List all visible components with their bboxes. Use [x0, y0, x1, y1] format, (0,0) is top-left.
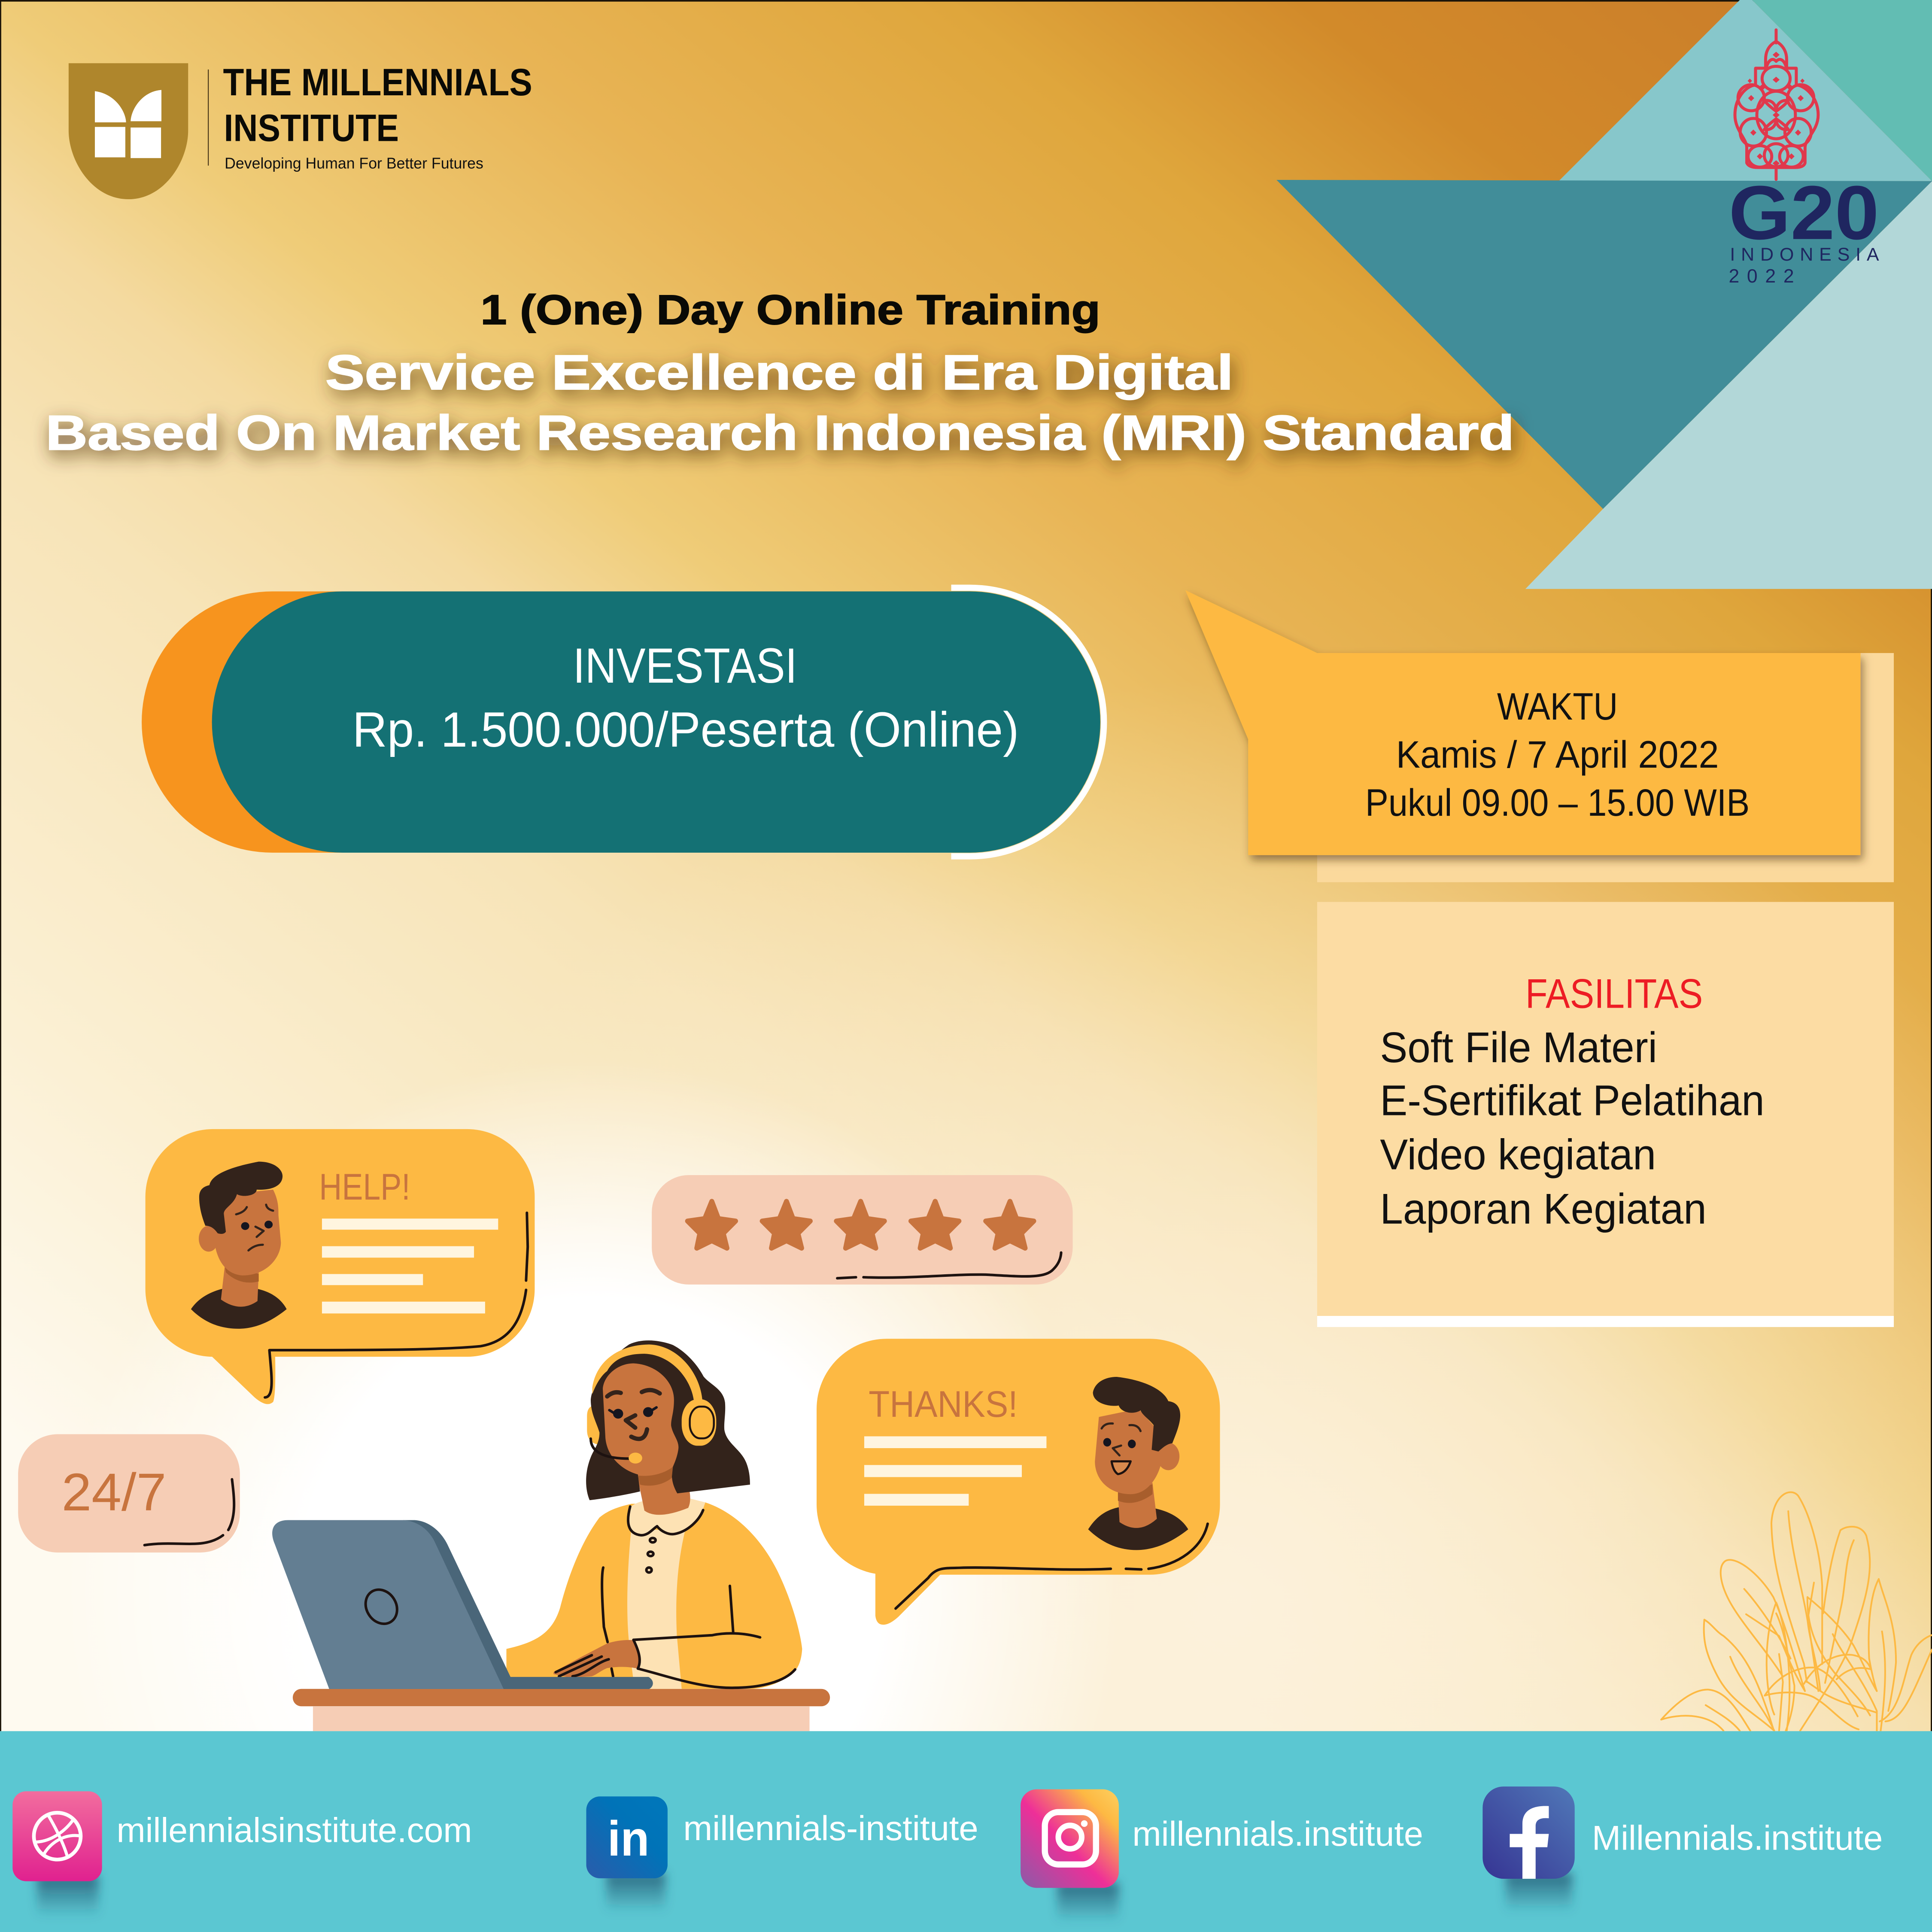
title line 1: Service Excellence di Era Digital: [325, 345, 1233, 400]
panel: waktu backing: [1317, 653, 1894, 882]
title line 2: Based On Market Research Indonesia (MRI) Standard: [46, 406, 1514, 461]
price: Rp. 1.500.000/Peserta (Online): [352, 702, 1019, 757]
rating bubble: [652, 1175, 1073, 1285]
help label: HELP!: [319, 1166, 410, 1208]
investasi label: INVESTASI: [573, 638, 797, 693]
fasilitas item 2: E-Sertifikat Pelatihan: [1380, 1076, 1765, 1124]
fasilitas item 4: Laporan Kegiatan: [1380, 1185, 1707, 1233]
INDONESIA label: INDONESIA: [1730, 244, 1879, 265]
training type heading: 1 (One) Day Online Training: [480, 286, 1100, 333]
laptop: [272, 1520, 653, 1689]
icon: facebook: [1482, 1786, 1575, 1879]
help text lines: [322, 1218, 498, 1313]
icon: red gunungan ornament: [1735, 30, 1818, 179]
laptop logo circle: [359, 1584, 403, 1630]
geometric triangles top right: [1276, 0, 1932, 589]
woman at laptop illustration: [272, 1340, 830, 1731]
website url: millennialsinstitute.com: [116, 1811, 472, 1850]
thanks speech bubble: [817, 1339, 1220, 1625]
help speech bubble: [146, 1129, 535, 1404]
social: facebook: [1482, 1786, 1883, 1912]
icon: instagram: [1021, 1789, 1119, 1888]
24/7 bubble: [18, 1434, 240, 1552]
five stars: [687, 1201, 1034, 1248]
time: Pukul 09.00 – 15.00 WIB: [1365, 781, 1750, 824]
panel: fasilitas: [1317, 902, 1894, 1327]
thanks label: THANKS!: [869, 1384, 1018, 1425]
date: Kamis / 7 April 2022: [1396, 733, 1719, 776]
social: linkedin: [586, 1796, 978, 1912]
G20 wordmark: G20: [1728, 170, 1879, 255]
instagram handle: millennials.institute: [1132, 1815, 1423, 1853]
plant line art: [1661, 1492, 1932, 1731]
icon: linkedin: in: [608, 1811, 649, 1866]
footer band: [0, 1731, 1932, 1932]
24/7 label: 24/7: [61, 1463, 166, 1522]
icon: dribbble ball: [12, 1791, 102, 1881]
title block: [46, 286, 1514, 461]
logo wordmark line 2: INSTITUTE: [224, 106, 399, 149]
social: instagram: [1021, 1789, 1423, 1922]
facebook handle: Millennials.institute: [1592, 1819, 1883, 1857]
social: website: [12, 1791, 472, 1917]
fasilitas heading: FASILITAS: [1525, 971, 1703, 1017]
man with happy face: [1088, 1377, 1188, 1550]
panel: waktu callout: [1185, 590, 1861, 855]
fasilitas item 3: Video kegiatan: [1380, 1131, 1656, 1179]
linkedin handle: millennials-institute: [683, 1809, 978, 1848]
2022 label: 2022: [1728, 266, 1794, 287]
woman with headset: [506, 1340, 802, 1689]
thanks text lines: [864, 1436, 1046, 1506]
G20 Indonesia logo: [1728, 30, 1879, 287]
desk: [293, 1689, 830, 1731]
fasilitas item 1: Soft File Materi: [1380, 1024, 1657, 1072]
icon: shield with window: [69, 63, 188, 199]
panel: investasi pill: [142, 588, 1104, 857]
logo tagline: Developing Human For Better Futures: [225, 154, 483, 172]
waktu heading: WAKTU: [1497, 685, 1618, 728]
logo: The Millennials Institute: [69, 61, 532, 199]
logo wordmark: THE MILLENNIALS: [223, 61, 532, 103]
icon: linkedin: [586, 1796, 668, 1878]
man with sad face: [191, 1162, 287, 1329]
